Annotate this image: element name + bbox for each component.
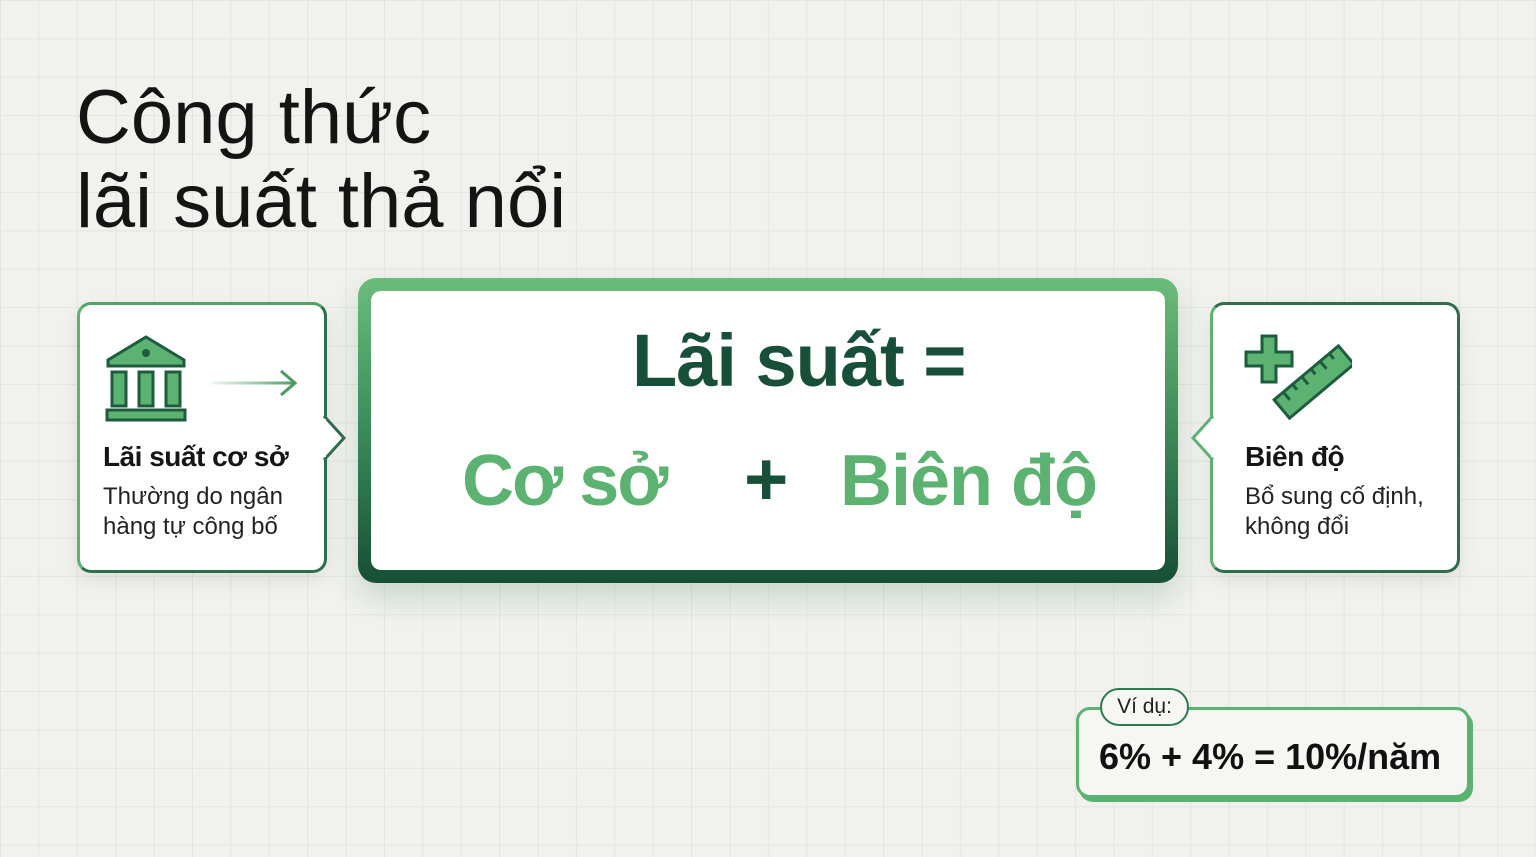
text: hàng tự công bố xyxy=(103,513,278,540)
term: base: Cơ sở xyxy=(462,441,666,521)
plus: + xyxy=(744,437,788,522)
panel: base rate xyxy=(76,302,346,582)
example box xyxy=(1076,688,1473,802)
panel: margin xyxy=(1191,302,1462,582)
title: Công thức xyxy=(76,75,431,160)
title: lãi suất thả nổi xyxy=(76,159,566,244)
icon: bank xyxy=(106,335,186,422)
text: Thường do ngân xyxy=(103,483,283,510)
term: margin: Biên độ xyxy=(840,441,1097,521)
icon: plus and ruler xyxy=(1244,334,1352,420)
example value: 6% + 4% = 10%/năm xyxy=(1099,736,1441,777)
text xyxy=(1245,483,1424,540)
formula heading: Lãi suất = xyxy=(632,319,965,402)
pointer xyxy=(1191,416,1214,460)
arrow xyxy=(211,370,298,396)
text: không đổi xyxy=(1245,513,1349,540)
pointer xyxy=(323,416,346,460)
pill: label xyxy=(1100,688,1189,726)
panel: main formula xyxy=(358,278,1178,583)
heading: Lãi suất cơ sở xyxy=(103,441,288,472)
heading: Biên độ xyxy=(1245,441,1344,472)
text: Bổ sung cố định, xyxy=(1245,483,1424,510)
title xyxy=(76,75,566,244)
text xyxy=(103,483,283,540)
pill: label: Ví dụ: xyxy=(1117,695,1172,718)
